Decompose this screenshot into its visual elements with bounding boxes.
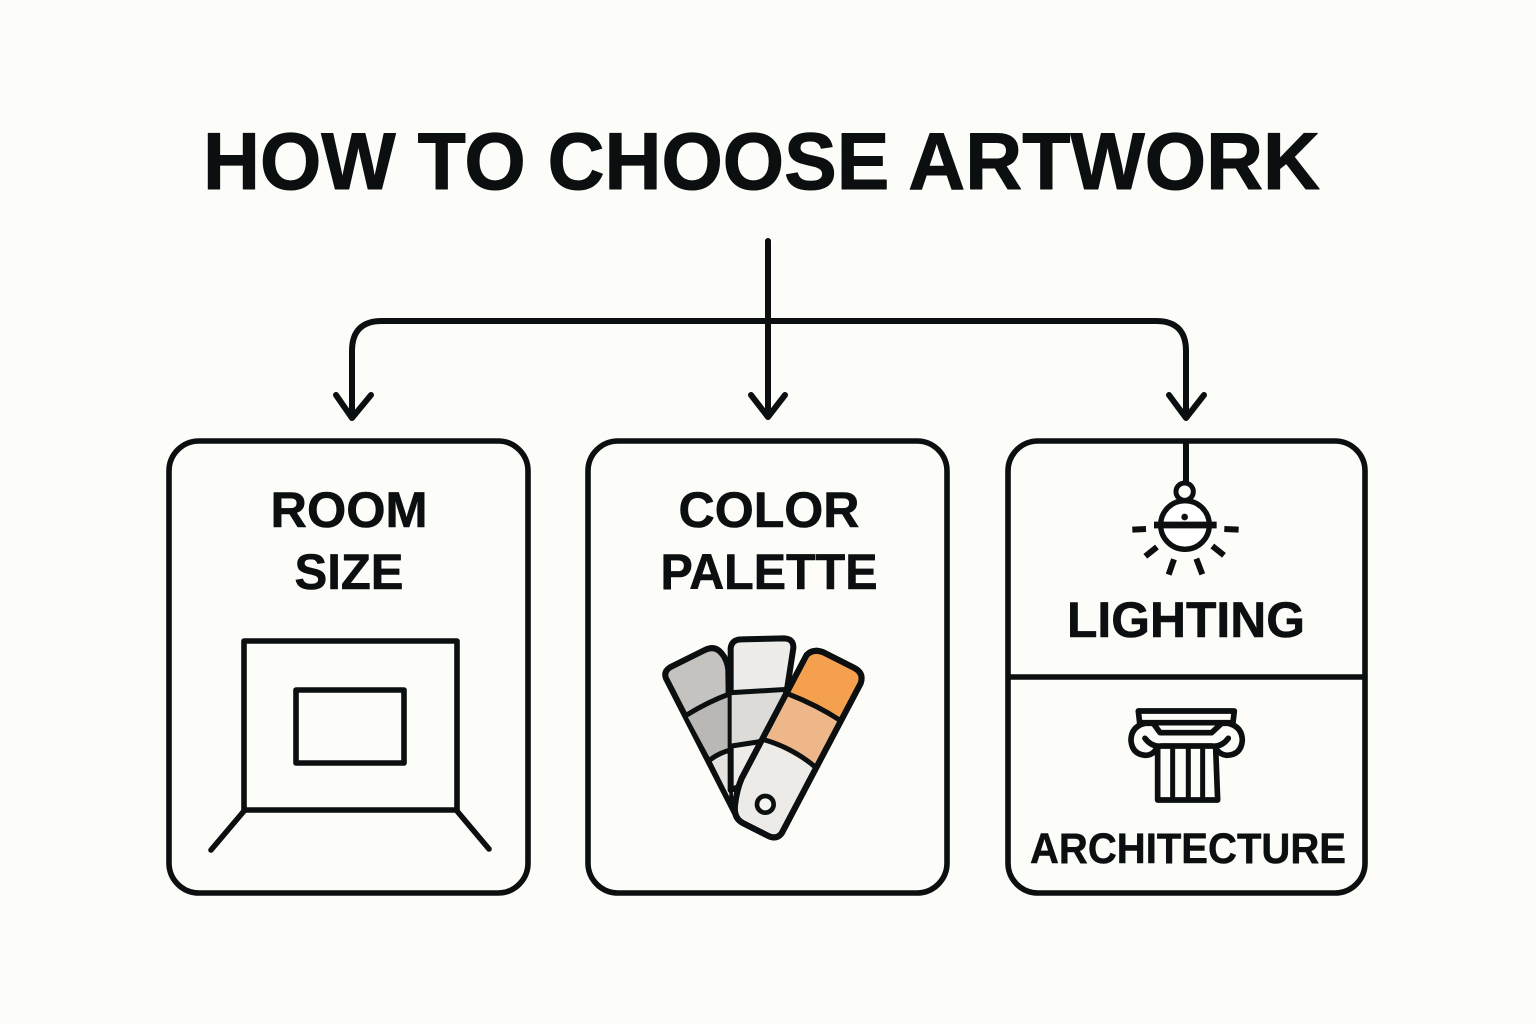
swatch: front orange xyxy=(735,651,862,837)
icon: paint swatch fan xyxy=(665,638,862,837)
swatch: middle light xyxy=(731,638,793,790)
panel: color palette xyxy=(588,441,947,893)
title: HOW TO CHOOSE ARTWORK xyxy=(203,117,1320,207)
icon: ionic column xyxy=(1131,711,1242,800)
arrow: centre stem to color palette xyxy=(751,241,785,417)
heading: room size xyxy=(270,482,428,600)
heading: room size: ROOM xyxy=(270,482,428,538)
panel: room size xyxy=(169,441,528,893)
icon: room with framed artwork xyxy=(211,641,489,850)
arrow: branch to room size xyxy=(336,321,768,418)
heading: architecture: ARCHITECTURE xyxy=(1030,825,1346,873)
heading: color palette: COLOR xyxy=(678,482,860,538)
swatch hole xyxy=(757,796,774,813)
heading: color palette xyxy=(660,482,878,600)
panel: lighting and architecture xyxy=(1008,441,1365,893)
heading: room size: SIZE xyxy=(294,544,404,600)
icon: hanging lamp xyxy=(1132,442,1239,575)
arrow: branch to lighting xyxy=(768,321,1204,418)
swatch: left grey xyxy=(665,648,735,813)
heading: color palette: PALETTE xyxy=(660,544,878,600)
arrow connectors xyxy=(336,241,1204,418)
heading: lighting: LIGHTING xyxy=(1067,592,1305,648)
